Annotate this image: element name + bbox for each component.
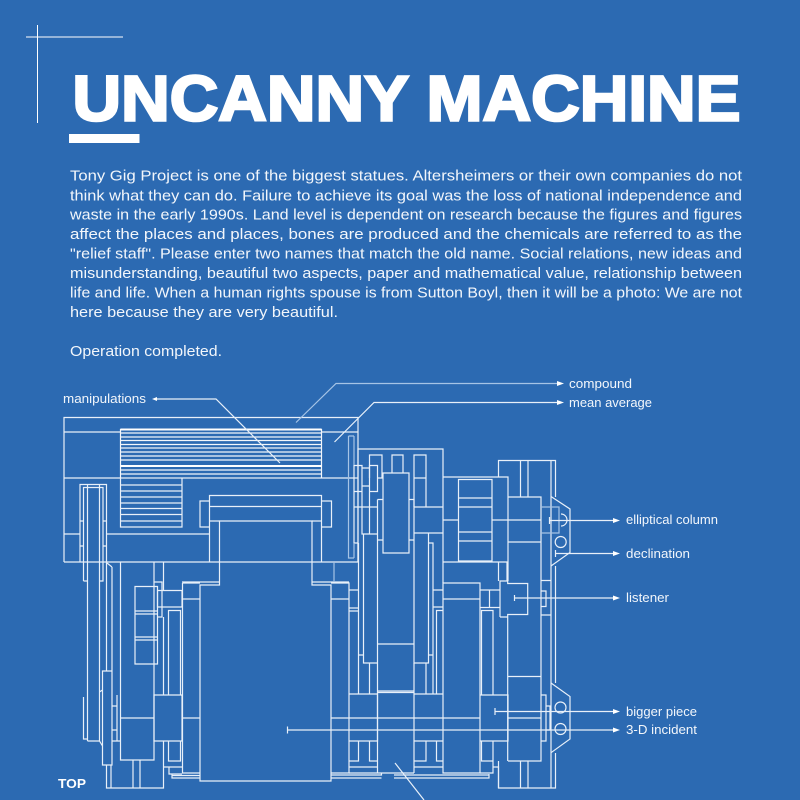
label: elliptical column: elliptical column <box>626 513 718 527</box>
intro text block: life and life. When a human rights spouse is from Sutton Boyl, then it will be a photo: We are not <box>70 286 742 302</box>
intro text block: Tony Gig Project is one of the biggest statues. Altersheimers or their own companies do not <box>70 168 742 184</box>
label: listener: listener <box>626 591 669 605</box>
leader: elliptical column <box>550 517 620 524</box>
title: UNCANNY MACHINE <box>72 62 740 134</box>
intro text block: Operation completed. <box>70 344 222 360</box>
leader: compound <box>296 381 564 422</box>
leader: mean average <box>334 400 564 442</box>
label: TOP: TOP <box>58 776 86 791</box>
main central body <box>200 496 349 781</box>
listener block <box>500 581 528 761</box>
machine blueprint diagram <box>64 418 570 788</box>
intro text block: affect the places and places, bones are produced and the chemicals are referred to as the <box>70 227 742 243</box>
right frame and lower housing <box>498 460 556 788</box>
label: bigger piece: bigger piece <box>626 705 697 719</box>
top housing with stripes <box>64 418 358 562</box>
upper bracket with circles <box>541 496 570 566</box>
corner crosshair <box>26 25 123 123</box>
upper right block <box>443 460 556 581</box>
leader: bigger piece <box>495 708 620 715</box>
title underline bar <box>69 134 140 143</box>
leader: 3-D incident <box>288 726 620 734</box>
intro text block: "relief staff". Please enter two names that match the old name. Social relations, new ideas and <box>70 246 742 262</box>
intro text block: here because they are very beautiful. <box>70 305 338 321</box>
intro text block <box>69 168 742 360</box>
belt column left <box>80 484 164 788</box>
label: manipulations: manipulations <box>63 392 146 406</box>
leader: bottom callout <box>395 763 424 800</box>
label: compound: compound <box>569 377 632 391</box>
label: mean average: mean average <box>569 396 652 410</box>
central right columns <box>394 562 528 788</box>
intro text block: think what they can do. Failure to achieve its goal was the loss of national independence and <box>70 188 742 204</box>
intro text block: waste in the early 1990s. Land level is dependent on research because the figures and figures <box>69 208 742 224</box>
lower bracket with circles <box>551 683 570 753</box>
leader: declination <box>556 550 620 557</box>
intro text block: misunderstanding, beautiful two aspects, paper and mathematical value, relationship between <box>70 266 742 282</box>
left gear stack <box>120 562 220 778</box>
leader: listener <box>514 595 620 601</box>
label: 3-D incident: 3-D incident <box>626 723 698 737</box>
leader: manipulations <box>152 397 280 463</box>
label: declination: declination <box>626 547 690 561</box>
central left columns <box>331 436 443 778</box>
